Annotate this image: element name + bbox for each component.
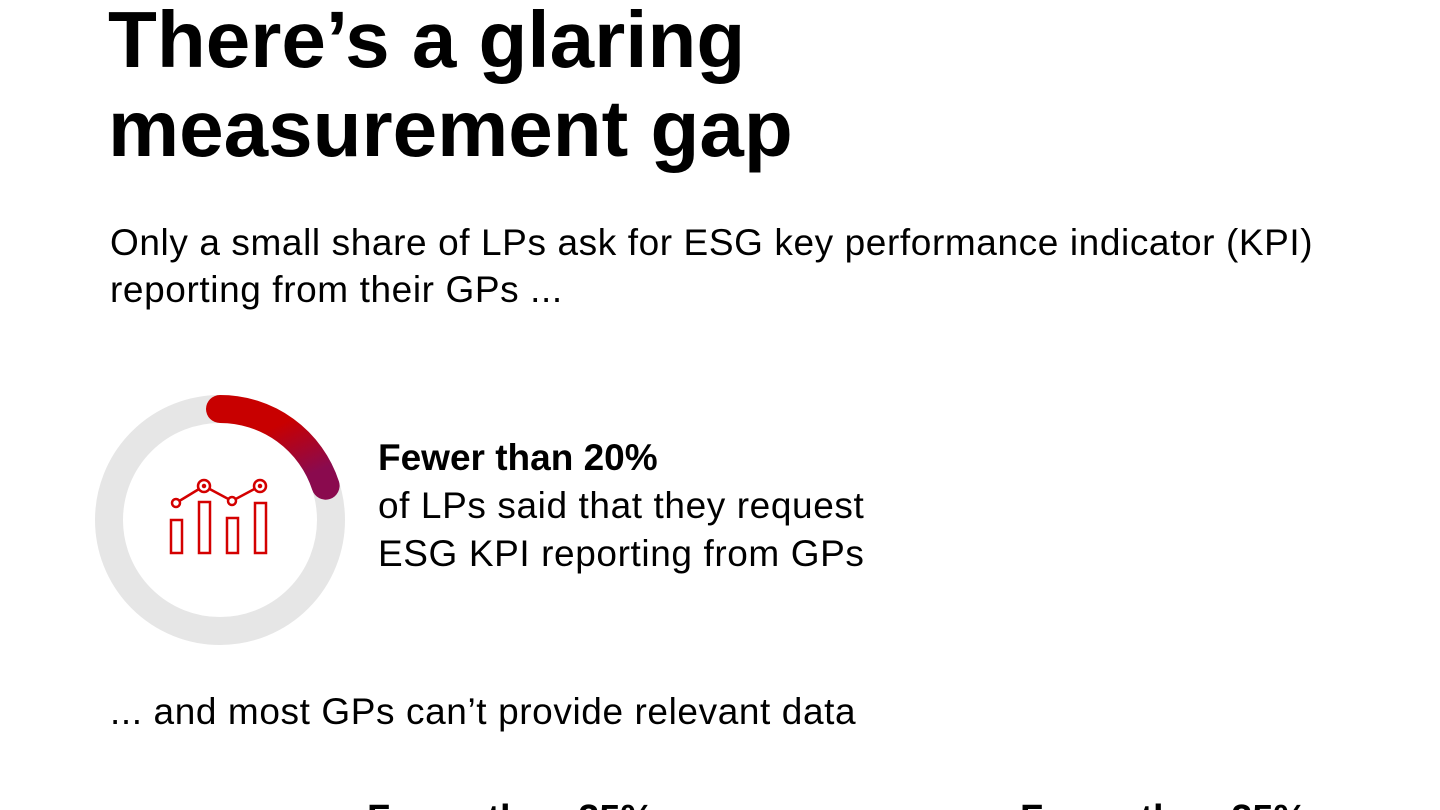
- second statement: ... and most GPs can’t provide relevant data: [110, 691, 856, 732]
- subtitle: Only a small share of LPs ask for ESG key performance indicator (KPI): [110, 222, 1313, 263]
- stat text: of LPs said that they request: [378, 485, 864, 526]
- subtitle: reporting from their GPs ...: [110, 269, 563, 310]
- subtitle: [110, 222, 1313, 310]
- donut chart: fewer than 20%: [95, 395, 345, 645]
- stat text: [378, 437, 864, 574]
- title: [108, 0, 793, 173]
- icon: bar chart: [171, 480, 266, 553]
- stat text: Fewer than 20%: [378, 437, 658, 478]
- bottom donuts (cut off): [0, 800, 1440, 810]
- title: measurement gap: [108, 84, 793, 173]
- stat text: ESG KPI reporting from GPs: [378, 533, 864, 574]
